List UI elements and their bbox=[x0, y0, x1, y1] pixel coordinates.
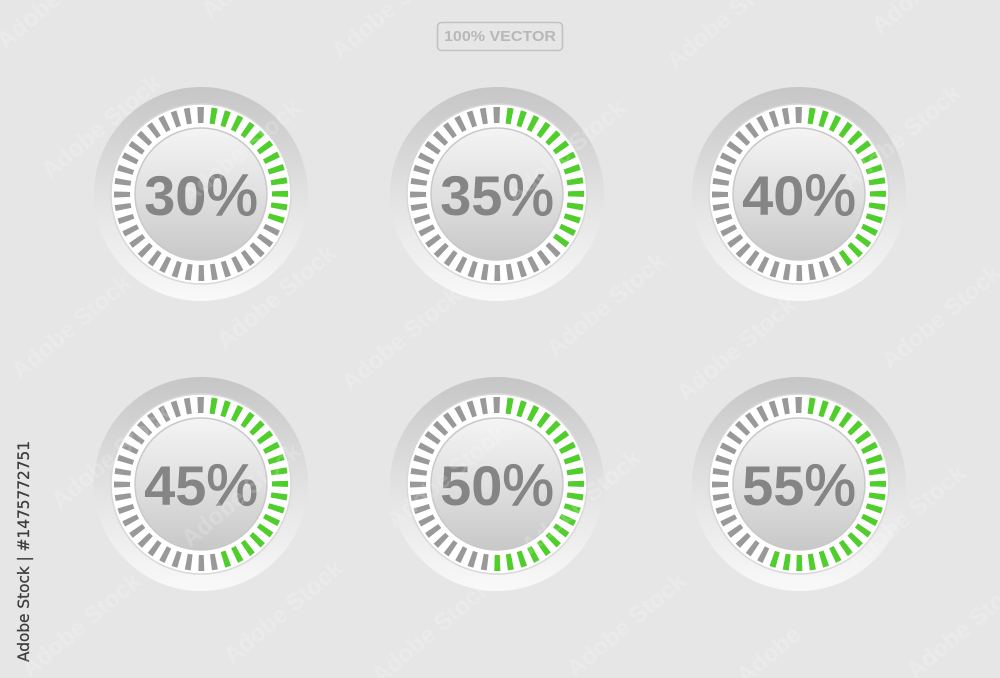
watermark pattern: Adobe Stock bbox=[837, 79, 967, 195]
value label: 35% bbox=[440, 163, 554, 228]
watermark pattern: Adobe Stock bbox=[219, 554, 349, 670]
watermark pattern: Adobe Stock bbox=[502, 94, 632, 210]
watermark pattern: Adobe Stock bbox=[7, 269, 137, 385]
gauge: 35% bbox=[390, 87, 604, 301]
value label: 30% bbox=[144, 163, 258, 228]
watermark pattern: Adobe Stock bbox=[47, 399, 177, 515]
value label: 45% bbox=[144, 453, 258, 518]
value label: 55% bbox=[742, 453, 856, 518]
badge: 100% vector bbox=[438, 22, 562, 50]
side credit text: Adobe Stock | #1475772751 bbox=[14, 441, 33, 662]
watermark pattern: Adobe Stock bbox=[37, 69, 167, 185]
badge: 100% vector: 100% VECTOR bbox=[444, 28, 556, 45]
gauge: 45% bbox=[94, 377, 308, 591]
watermark pattern: Adobe Stock bbox=[517, 444, 647, 560]
watermark pattern: Adobe Stock bbox=[382, 419, 512, 535]
value label: 50% bbox=[440, 453, 554, 518]
watermark pattern: Adobe Stock bbox=[177, 437, 307, 553]
watermark pattern: Adobe Stock bbox=[542, 247, 672, 363]
gauge: 55% bbox=[692, 377, 906, 591]
watermark pattern: Adobe Stock bbox=[177, 94, 307, 210]
watermark pattern: Adobe Stock bbox=[672, 291, 802, 407]
watermark pattern: Adobe Stock bbox=[337, 281, 467, 397]
gauge: 40% bbox=[692, 87, 906, 301]
gauge: 30% bbox=[94, 87, 308, 301]
value label: 40% bbox=[742, 163, 856, 228]
watermark pattern: Adobe Stock bbox=[842, 459, 972, 575]
gauge: 50% bbox=[390, 377, 604, 591]
watermark pattern: Adobe Stock bbox=[212, 239, 342, 355]
